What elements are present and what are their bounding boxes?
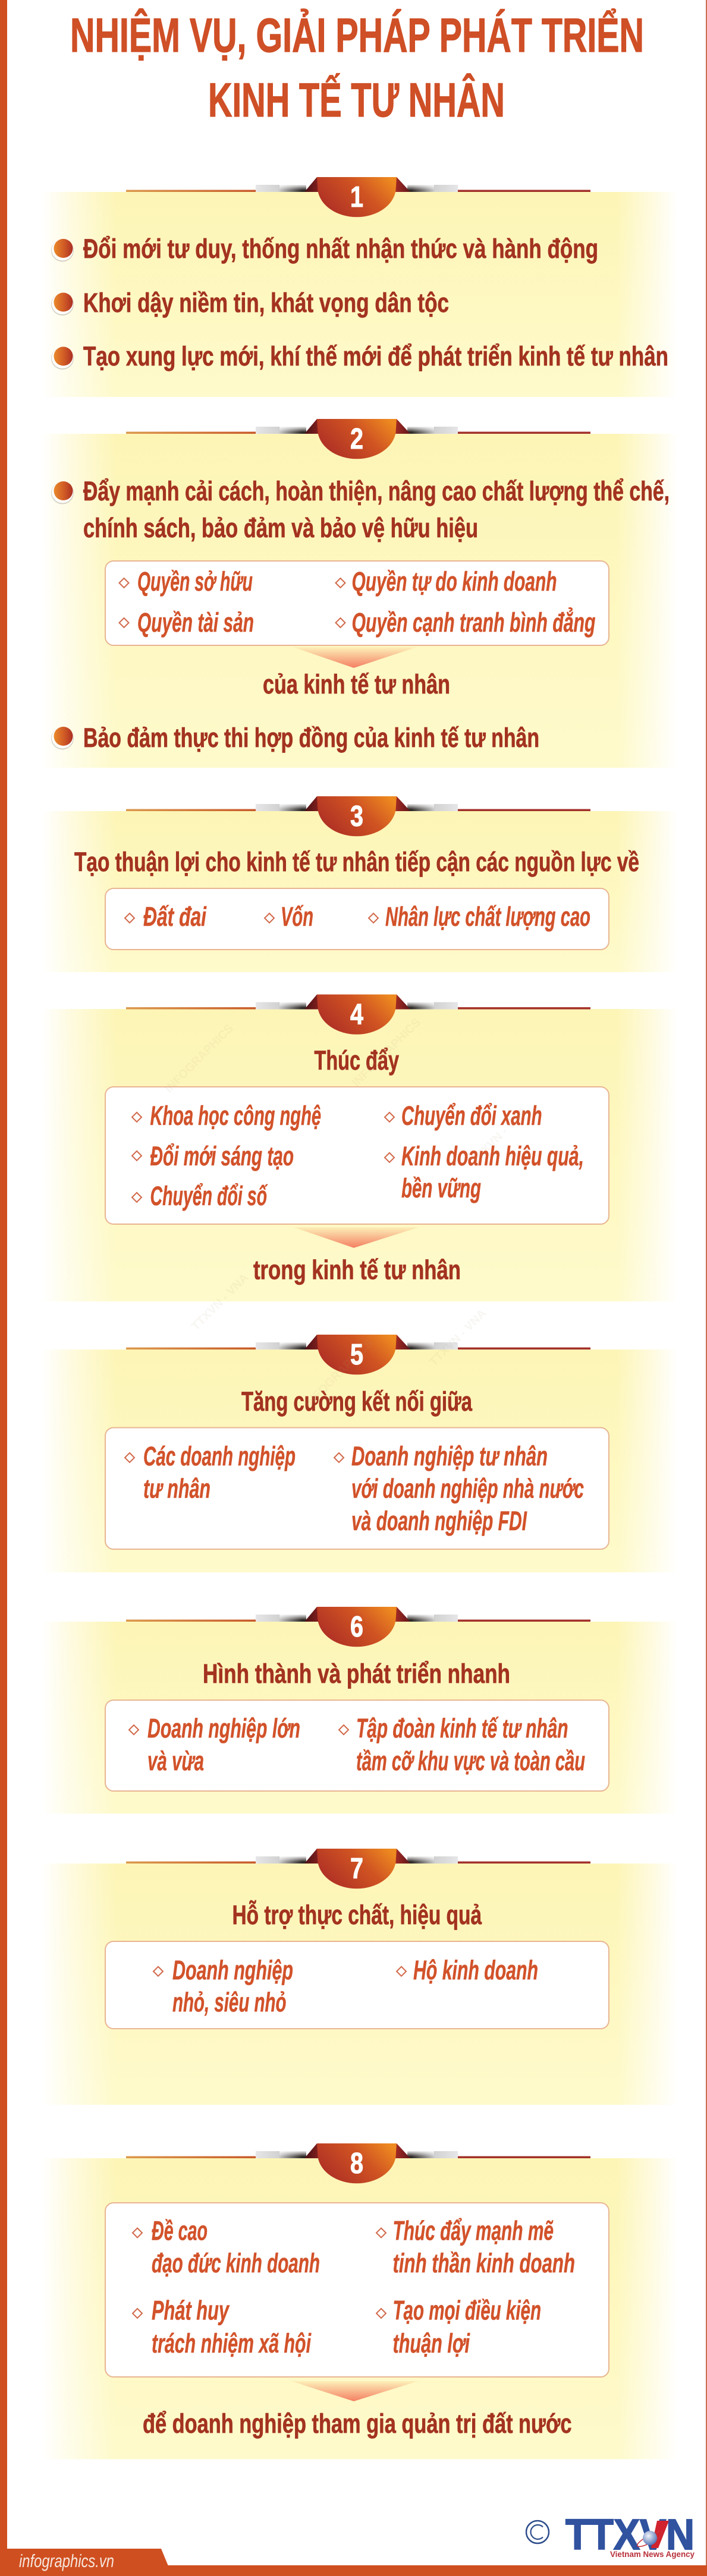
watermark: TTXVN - VNA — [189, 1271, 251, 1333]
box: values: thuận lợi — [392, 2328, 470, 2359]
bullet 2 — [51, 292, 74, 316]
bullet — [51, 727, 74, 750]
badge 1 — [126, 177, 590, 217]
panel: section 7 — [36, 1849, 681, 2105]
box: rights: Quyền cạnh tranh bình đẳng — [352, 607, 596, 638]
badge 3: 3 — [350, 800, 363, 833]
box: drivers: Chuyển đổi xanh — [401, 1101, 542, 1131]
panel: section 1 — [36, 177, 681, 397]
box: resources: Nhân lực chất lượng cao — [385, 901, 590, 932]
box: drivers: Kinh doanh hiệu quả, — [401, 1141, 584, 1171]
box: drivers — [105, 1087, 609, 1224]
box: connections: Các doanh nghiệp — [143, 1441, 296, 1471]
bullet — [51, 481, 74, 504]
heading: Hình thành và phát triển nhanh — [203, 1659, 510, 1689]
box: support: Hộ kinh doanh — [413, 1955, 538, 1985]
box: drivers: Khoa học công nghệ — [150, 1101, 321, 1131]
badge 6 — [126, 1607, 590, 1647]
panel: section 3 — [36, 796, 681, 972]
box: values: tinh thần kinh doanh — [392, 2248, 575, 2278]
text: conclusion: để doanh nghiệp tham gia quản trị đất nước — [143, 2408, 572, 2439]
box: connections: Doanh nghiệp tư nhân — [351, 1441, 548, 1471]
badge 6: 6 — [350, 1611, 363, 1643]
panel: section 6 — [36, 1607, 681, 1814]
box: enterprises: và vừa — [147, 1746, 204, 1776]
box: enterprises: Doanh nghiệp lớn — [147, 1713, 300, 1743]
panel: section 2 — [36, 419, 681, 768]
heading: Thúc đẩy — [314, 1045, 399, 1076]
badge 2: 2 — [350, 423, 363, 455]
box: rights: Quyền tài sản — [137, 607, 254, 638]
box: values: Đề cao — [152, 2215, 208, 2246]
box: enterprises: Tập đoàn kinh tế tư nhân — [356, 1713, 568, 1743]
box: connections — [105, 1427, 609, 1549]
footer bar — [0, 2549, 707, 2576]
logo: TTXVN: Vietnam News Agency — [610, 2550, 695, 2559]
watermark: TTXVN - VNA — [469, 1105, 530, 1167]
title — [70, 8, 644, 127]
badge 3 — [126, 796, 590, 836]
box: rights: Quyền sở hữu — [137, 566, 253, 597]
box: values: đạo đức kinh doanh — [152, 2248, 320, 2278]
text: contract: Bảo đảm thực thi hợp đồng của kinh tế tư nhân — [83, 723, 539, 753]
bullet 3 — [51, 347, 74, 370]
badge 4: 4 — [350, 998, 363, 1030]
watermark: TTXVN - VNA — [427, 1307, 489, 1369]
box: connections: với doanh nghiệp nhà nước — [351, 1474, 584, 1503]
logo: TTXVN: TTXVN — [565, 2511, 695, 2559]
text: conclusion: trong kinh tế tư nhân — [253, 1255, 461, 1285]
badge 5: 5 — [350, 1339, 363, 1371]
text: conclusion: của kinh tế tư nhân — [263, 669, 450, 699]
footer source: infographics.vn — [19, 2550, 114, 2571]
arrow — [293, 1227, 419, 1248]
watermark: INFOGRAPHICS — [350, 1016, 423, 1090]
arrow — [291, 2381, 418, 2401]
box: drivers: Chuyển đổi số — [150, 1181, 268, 1211]
box: rights — [105, 561, 609, 645]
badge 1: 1 — [350, 181, 363, 213]
badge 4 — [126, 995, 590, 1035]
box: drivers: Đổi mới sáng tạo — [150, 1141, 294, 1171]
copyright symbol — [526, 2521, 549, 2543]
watermark: INFOGRAPHICS — [162, 1022, 236, 1096]
badge 5 — [126, 1335, 590, 1374]
badge 7 — [126, 1849, 590, 1888]
watermark: INFOGRAPHICS — [302, 1337, 376, 1411]
box: connections: và doanh nghiệp FDI — [351, 1506, 527, 1536]
box: values — [105, 2203, 609, 2377]
bullet 1 — [51, 239, 74, 261]
box: enterprises: tầm cỡ khu vực và toàn cầu — [356, 1746, 585, 1776]
box: values: Phát huy — [152, 2295, 230, 2326]
box: resources: Vốn — [281, 901, 313, 932]
box: values: trách nhiệm xã hội — [152, 2328, 312, 2359]
box: values: Thúc đẩy mạnh mẽ — [392, 2215, 554, 2246]
title: KINH TẾ TƯ NHÂN — [208, 73, 505, 127]
box: rights: Quyền tự do kinh doanh — [352, 566, 557, 597]
text: lead: chính sách, bảo đảm và bảo vệ hữu hiệu — [83, 513, 478, 543]
watermark — [162, 1016, 530, 1411]
arrow — [293, 647, 417, 668]
text: lead — [83, 476, 670, 543]
box: resources: Đất đai — [143, 901, 207, 932]
box: resources — [105, 888, 609, 950]
panel: section 4 — [36, 995, 681, 1301]
box: enterprises — [105, 1700, 609, 1791]
box: values: Tạo mọi điều kiện — [392, 2295, 541, 2326]
badge 8 — [126, 2143, 590, 2183]
badge 7: 7 — [350, 1853, 363, 1885]
box: support: nhỏ, siêu nhỏ — [172, 1987, 287, 2017]
badge 8: 8 — [350, 2148, 363, 2180]
badge 2 — [126, 419, 590, 459]
heading: Hỗ trợ thực chất, hiệu quả — [232, 1900, 482, 1930]
text: item 2: Khơi dậy niềm tin, khát vọng dân tộc — [83, 288, 449, 318]
box: support — [105, 1941, 609, 2029]
panel: section 8 — [36, 2143, 681, 2459]
heading: Tăng cường kết nối giữa — [241, 1386, 473, 1417]
panel: section 5 — [36, 1335, 681, 1572]
box: support: Doanh nghiệp — [172, 1955, 293, 1985]
box: drivers: bền vững — [401, 1173, 481, 1203]
box: connections: tư nhân — [143, 1474, 210, 1503]
